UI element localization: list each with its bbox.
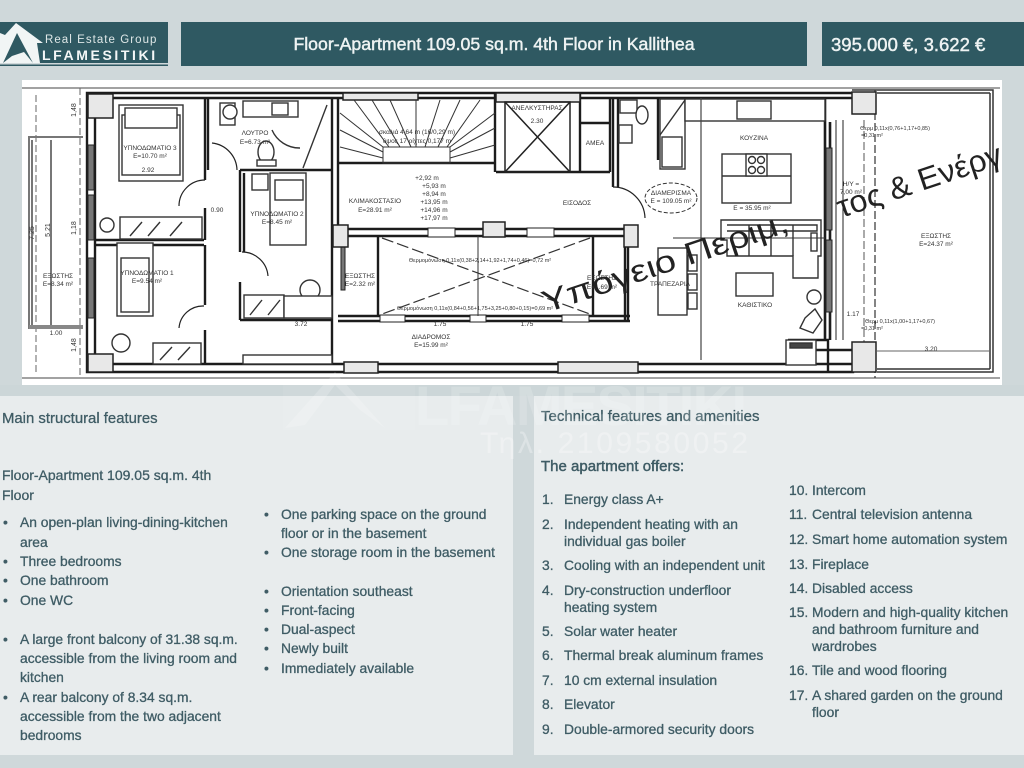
heading: technical features: Technical features and amenities bbox=[541, 408, 759, 425]
list: features 10 to 17: wardrobes bbox=[812, 638, 877, 654]
void dashed X bbox=[382, 238, 590, 314]
room labels: +17,97 m bbox=[420, 215, 448, 222]
logo banner: LFAMESITIKI bbox=[42, 47, 158, 63]
list: features 1 to 9: Elevator bbox=[564, 696, 615, 712]
list: layout bullets: bedrooms bbox=[20, 727, 82, 743]
list: parking and orientation bullets: Newly built bbox=[281, 640, 348, 656]
room labels: 1.17 bbox=[847, 311, 860, 318]
list: layout bullets: • bbox=[3, 514, 8, 530]
list: layout bullets: accessible from the two adjacent bbox=[20, 708, 221, 724]
room labels: ΕΙΣΟΔΟΣ bbox=[563, 200, 591, 207]
list: features 1 to 9: Independent heating with an bbox=[564, 516, 738, 532]
list: parking and orientation bullets: • bbox=[264, 506, 269, 522]
list: features 1 to 9 bbox=[542, 491, 765, 738]
title bar: Floor-Apartment 109.05 sq.m. 4th Floor in Kallithea bbox=[293, 34, 695, 54]
list: features 1 to 9: individual gas boiler bbox=[564, 533, 686, 549]
room labels: ΑΜΕΑ bbox=[586, 140, 605, 147]
lift bbox=[505, 102, 570, 172]
list: features 1 to 9: Solar water heater bbox=[564, 623, 677, 639]
list: features 10 to 17: 14. bbox=[789, 580, 808, 596]
room labels: ΥΠΝΟΔΩΜΑΤΙΟ 1 bbox=[120, 270, 174, 277]
list: features 1 to 9: 8. bbox=[542, 696, 554, 712]
list: features 1 to 9: 3. bbox=[542, 557, 554, 573]
list: features 10 to 17: 17. bbox=[789, 687, 808, 703]
room labels: ΔΙΑΔΡΟΜΟΣ bbox=[412, 334, 450, 341]
list: layout bullets: • bbox=[3, 689, 8, 705]
room labels: ύψος 17 ρίχτες 0,177 m bbox=[383, 137, 451, 145]
room labels: E=6.73 m² bbox=[240, 139, 271, 146]
list: parking and orientation bullets: One parking space on the ground bbox=[281, 506, 486, 522]
room labels: σκαλιά 4,64 m (16/0,29 m) bbox=[379, 128, 455, 136]
list: features 10 to 17: Fireplace bbox=[812, 556, 869, 572]
price bar: 395.000 €, 3.622 € bbox=[831, 34, 985, 55]
list: features 10 to 17: 11. bbox=[789, 506, 807, 522]
room labels: +5,93 m bbox=[422, 183, 446, 190]
list: layout bullets: kitchen bbox=[20, 669, 64, 685]
room labels: ΚΟΥΖΙΝΑ bbox=[740, 135, 769, 142]
room labels: E = 109.05 m² bbox=[650, 198, 692, 205]
list: features 10 to 17: 12. bbox=[789, 531, 808, 547]
list: features 1 to 9: heating system bbox=[564, 599, 657, 615]
room labels: E=8.45 m² bbox=[262, 219, 293, 226]
room labels: ΚΛΙΜΑΚΟΣΤΑΣΙΟ bbox=[349, 198, 401, 205]
room labels: Θερμομόνωση 0,11x(0,38+2,14+1,92+1,74+0,46)=0,72 m² bbox=[409, 257, 551, 264]
room labels: +13,95 m bbox=[420, 199, 448, 206]
room labels: ΤΡΑΠΕΖΑΡΙΑ bbox=[650, 281, 691, 288]
list: parking and orientation bullets: Immediately available bbox=[281, 660, 414, 676]
panel: technical features and amenities bbox=[534, 396, 1024, 755]
list: layout bullets: One WC bbox=[20, 592, 73, 608]
windows and openings bbox=[88, 145, 832, 318]
list: layout bullets: A large front balcony of 31.38 sq.m. bbox=[20, 631, 238, 647]
heading: main structural features: Main structural features bbox=[2, 411, 158, 427]
list: layout bullets: area bbox=[20, 534, 48, 550]
list: features 1 to 9: 10 cm external insulation bbox=[564, 672, 717, 688]
room labels: +8,94 m bbox=[422, 191, 446, 198]
room labels: +14,96 m bbox=[420, 207, 448, 214]
list: features 10 to 17 bbox=[789, 482, 1008, 720]
room labels: Θερμομόνωση 0,11x(0,84+0,56+1,75+3,25+0,80+0,15)=0,69 m² bbox=[397, 305, 553, 312]
list: features 1 to 9: Dry-construction underfloor bbox=[564, 582, 731, 598]
list: layout bullets: • bbox=[3, 631, 8, 647]
room labels: E=2.32 m² bbox=[345, 281, 376, 288]
room labels: 1.00 bbox=[50, 330, 63, 337]
list: parking and orientation bullets bbox=[264, 506, 495, 676]
heading: the apartment offers: The apartment offers: bbox=[541, 458, 684, 475]
list: layout bullets: Three bedrooms bbox=[20, 553, 122, 569]
room labels: E=9.54 m² bbox=[132, 278, 163, 285]
list: layout bullets: • bbox=[3, 553, 8, 569]
list: features 1 to 9: 2. bbox=[542, 516, 554, 532]
room labels: Θερμ 0,11x(1,00+1,17+0,67) bbox=[865, 319, 935, 325]
list: features 10 to 17: Tile and wood flooring bbox=[812, 662, 947, 678]
text: apartment description: Floor-Apartment 109.05 sq.m. 4th bbox=[2, 467, 211, 483]
room labels: 0.90 bbox=[211, 207, 224, 214]
room labels: H/Y = bbox=[843, 181, 859, 188]
list: layout bullets: An open-plan living-dining-kitchen bbox=[20, 514, 228, 530]
list: features 10 to 17: 10. bbox=[789, 482, 808, 498]
floor plan bbox=[22, 80, 1002, 385]
text: apartment description bbox=[2, 467, 211, 503]
list: parking and orientation bullets: One storage room in the basement bbox=[281, 544, 495, 560]
list: parking and orientation bullets: • bbox=[264, 602, 269, 618]
room labels: ΔΙΑΜΕΡΙΣΜΑ bbox=[651, 190, 692, 197]
list: parking and orientation bullets: • bbox=[264, 544, 269, 560]
list: features 1 to 9: 1. bbox=[542, 491, 554, 507]
list: features 1 to 9: Thermal break aluminum frames bbox=[564, 647, 763, 663]
room labels: E=24.37 m² bbox=[919, 241, 954, 248]
list: parking and orientation bullets: • bbox=[264, 640, 269, 656]
list: features 10 to 17: Disabled access bbox=[812, 580, 913, 596]
list: features 10 to 17: Smart home automation system bbox=[812, 531, 1007, 547]
text: apartment description: Floor bbox=[2, 487, 34, 503]
list: layout bullets: A rear balcony of 8.34 sq.m. bbox=[20, 689, 192, 705]
watermark: LFAMESITIKI bbox=[415, 374, 750, 437]
room labels: 1.75 bbox=[521, 321, 534, 328]
list: parking and orientation bullets: • bbox=[264, 621, 269, 637]
door arcs bbox=[179, 143, 645, 328]
room labels: +2,92 m bbox=[415, 175, 439, 182]
list: features 1 to 9: 5. bbox=[542, 623, 554, 639]
list: features 1 to 9: Energy class A+ bbox=[564, 491, 664, 507]
list: features 1 to 9: Double-armored security doors bbox=[564, 721, 754, 737]
handwritten overlay text left: Υπόγειο Περιμ, bbox=[537, 205, 793, 320]
list: features 1 to 9: 7. bbox=[542, 672, 554, 688]
list: features 1 to 9: 9. bbox=[542, 721, 554, 737]
room labels: 7.25 bbox=[29, 226, 36, 240]
room labels: E=28.91 m² bbox=[358, 207, 393, 214]
room labels: 5.21 bbox=[45, 223, 52, 237]
logo banner bbox=[0, 22, 168, 66]
room labels: ΚΑΘΙΣΤΙΚΟ bbox=[738, 302, 772, 309]
list: parking and orientation bullets: • bbox=[264, 660, 269, 676]
list: parking and orientation bullets: floor or in the basement bbox=[281, 525, 426, 541]
room labels: ΑΝΕΛΚΥΣΤΗΡΑΣ bbox=[511, 105, 563, 112]
room labels: =0,31 m² bbox=[861, 326, 883, 332]
room labels: 1,48 bbox=[71, 103, 78, 117]
watermark: Τηλ. 2109580052 bbox=[480, 427, 748, 460]
room labels: ΕΞΩΣΤΗΣ bbox=[43, 273, 73, 280]
band under plan bbox=[0, 385, 1024, 396]
room labels: E=15.99 m² bbox=[414, 342, 449, 349]
room labels: ΛΟΥΤΡΟ bbox=[242, 130, 268, 137]
furniture bbox=[100, 99, 825, 365]
panel: main structural features bbox=[0, 396, 513, 755]
handwritten overlay text right: τος & Ενέργ bbox=[832, 137, 1007, 225]
hatched columns bbox=[88, 92, 876, 373]
title bar bbox=[181, 22, 807, 66]
staircase bbox=[340, 100, 495, 163]
room labels: E=10.70 m² bbox=[133, 153, 168, 160]
room labels: 1.75 bbox=[434, 321, 447, 328]
list: layout bullets bbox=[3, 514, 238, 743]
list: features 10 to 17: Central television antenna bbox=[812, 506, 972, 522]
list: parking and orientation bullets: • bbox=[264, 583, 269, 599]
room labels: 2.30 bbox=[531, 118, 544, 125]
room labels: 3.72 bbox=[295, 321, 308, 328]
list: features 10 to 17: floor bbox=[812, 704, 839, 720]
room labels: 1,48 bbox=[71, 338, 78, 352]
room labels: ΕΞΩΣΤΗΣ bbox=[921, 233, 951, 240]
room labels: E=8.34 m² bbox=[43, 281, 74, 288]
list: features 1 to 9: Cooling with an independent unit bbox=[564, 557, 765, 573]
room labels: 2.92 bbox=[142, 167, 155, 174]
list: features 10 to 17: Intercom bbox=[812, 482, 866, 498]
list: parking and orientation bullets: Orientation southeast bbox=[281, 583, 413, 599]
room labels: ΕΞΩΣΤΗΣ bbox=[345, 273, 375, 280]
list: parking and orientation bullets: Front-facing bbox=[281, 602, 355, 618]
list: features 10 to 17: 13. bbox=[789, 556, 808, 572]
room labels: 7,00 m² bbox=[840, 189, 863, 196]
room labels bbox=[29, 103, 954, 353]
list: layout bullets: accessible from the living room and bbox=[20, 650, 237, 666]
list: features 10 to 17: and bathroom furniture and bbox=[812, 621, 979, 637]
list: layout bullets: One bathroom bbox=[20, 572, 108, 588]
room labels: ΕΞΩΣΤΗΣ bbox=[587, 275, 617, 282]
list: features 10 to 17: 15. bbox=[789, 604, 808, 620]
room labels: 3.20 bbox=[925, 346, 938, 353]
list: layout bullets: • bbox=[3, 592, 8, 608]
room labels: ΥΠΝΟΔΩΜΑΤΙΟ 2 bbox=[250, 211, 304, 218]
list: features 10 to 17: Modern and high-quality kitchen bbox=[812, 604, 1008, 620]
list: features 10 to 17: A shared garden on the ground bbox=[812, 687, 1003, 703]
room labels: E = 35.95 m² bbox=[733, 205, 772, 212]
list: features 1 to 9: 4. bbox=[542, 582, 554, 598]
room labels: =0,31 m² bbox=[861, 133, 883, 139]
room labels: ΥΠΝΟΔΩΜΑΤΙΟ 3 bbox=[123, 145, 177, 152]
watermark bbox=[314, 372, 750, 460]
room labels: Θερμ 0,11x(0,76+1,17+0,85) bbox=[860, 126, 930, 132]
list: features 10 to 17: 16. bbox=[789, 662, 808, 678]
walls bbox=[87, 92, 853, 372]
logo banner: Real Estate Group bbox=[45, 34, 157, 46]
list: features 1 to 9: 6. bbox=[542, 647, 554, 663]
list: layout bullets: • bbox=[3, 572, 8, 588]
price bar bbox=[822, 22, 1024, 66]
list: parking and orientation bullets: Dual-aspect bbox=[281, 621, 355, 637]
room labels: 1,18 bbox=[71, 221, 78, 235]
room labels: E=1.69 m² bbox=[587, 284, 618, 291]
